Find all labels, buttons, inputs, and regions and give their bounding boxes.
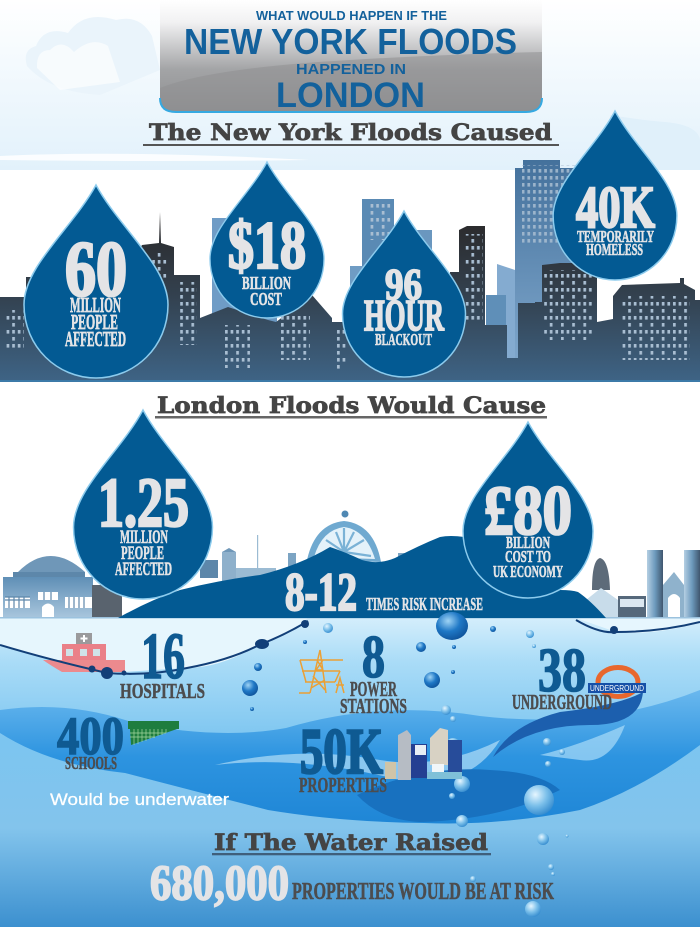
stat: 16 hospitals	[120, 620, 205, 703]
drop: 60 million people affected	[24, 185, 168, 378]
drop: 96 hour blackout: BLACKOUT	[375, 330, 432, 349]
Albert Hall	[3, 556, 122, 618]
river-side buildings	[586, 558, 646, 618]
stat: 400 schools: SCHOOLS	[65, 753, 117, 773]
wave line: right	[576, 620, 700, 634]
drop: 80 pounds billion cost: £80	[484, 473, 572, 550]
stat: 8 power stations: 8	[362, 624, 385, 690]
heading: London floods: London Floods Would Cause	[157, 393, 546, 419]
drop: 60 million people affected: 60	[65, 225, 127, 312]
Westminster	[647, 550, 700, 618]
bus and castle	[200, 535, 276, 582]
stat: 8 power stations	[340, 624, 407, 718]
stat: 50K properties	[299, 716, 387, 797]
drop: 80 pounds billion cost: BILLION	[506, 533, 550, 552]
drop: $18 billion cost: $18	[228, 207, 306, 283]
stat: 16 hospitals: HOSPITALS	[120, 679, 205, 703]
stat: 8 power stations: POWER	[350, 677, 397, 701]
icon: city buildings	[385, 728, 462, 780]
stat: 38 underground: 38	[538, 637, 586, 705]
title line 2: NEW YORK FLOODS	[184, 21, 517, 62]
stat: 8 power stations: STATIONS	[340, 694, 407, 718]
drop: 1.25 million people affected: PEOPLE	[121, 543, 164, 564]
stat: 680,000 properties at risk: 680,000	[150, 854, 289, 910]
title line 3: HAPPENED IN	[296, 61, 406, 78]
water background	[0, 618, 700, 927]
drop: 1.25 million people affected: MILLION	[120, 527, 168, 548]
drop: 60 million people affected: PEOPLE	[71, 310, 118, 334]
icon: underground roundel	[588, 668, 646, 696]
stat: 400 schools: 400	[57, 706, 124, 766]
drop: $18 billion cost	[210, 162, 324, 318]
drop: 80 pounds billion cost	[463, 422, 593, 598]
bubbles	[242, 612, 568, 917]
London skyline	[0, 510, 700, 618]
caption: would be underwater: Would be underwater	[50, 790, 229, 809]
drop: 96 hour blackout: 96	[385, 260, 422, 309]
blue hump: 8-12 times risk increase: TIMES RISK INCREASE	[366, 594, 483, 614]
icon: school	[128, 721, 179, 745]
drop: 40K temporarily homeless: HOMELESS	[586, 240, 643, 259]
sky background	[0, 0, 700, 620]
wave line: left	[0, 620, 309, 679]
drop: 80 pounds billion cost: UK ECONOMY	[493, 562, 563, 581]
drop: 40K temporarily homeless	[553, 111, 677, 280]
stat: 16 hospitals: 16	[141, 620, 185, 693]
icon: underground roundel: UNDERGROUND	[590, 684, 644, 693]
stat: 50K properties: 50K	[300, 716, 383, 788]
stat: 38 underground: UNDERGROUND	[512, 690, 612, 714]
clouds	[26, 17, 700, 170]
drop: 1.25 million people affected: 1.25	[98, 465, 189, 542]
blue hump: 8-12 times risk increase	[118, 536, 606, 622]
heading: New York floods: The New York Floods Caused	[149, 120, 552, 146]
dome	[288, 510, 406, 569]
drop: 1.25 million people affected: AFFECTED	[115, 559, 172, 580]
icon: hospital	[43, 633, 125, 672]
title line 4: LONDON	[276, 76, 425, 115]
drop: $18 billion cost: COST	[250, 289, 282, 309]
drop: 1.25 million people affected	[74, 410, 212, 599]
New York skyline	[0, 160, 700, 382]
title line 1: WHAT WOULD HAPPEN IF THE	[256, 8, 447, 23]
blue hump: 8-12 times risk increase: 8-12	[285, 562, 357, 622]
drop: 40K temporarily homeless: 40K	[576, 174, 655, 240]
drop: 60 million people affected: MILLION	[70, 293, 121, 317]
title panel	[160, 0, 542, 115]
drop: 96 hour blackout	[342, 211, 466, 377]
drop: 96 hour blackout: HOUR	[364, 291, 445, 340]
stat: 680,000 properties at risk	[150, 854, 554, 910]
lit windows	[4, 165, 690, 372]
stat: 38 underground	[512, 637, 612, 714]
icon: pylon	[299, 650, 344, 693]
drop: 80 pounds billion cost: COST TO	[505, 547, 551, 566]
heading: if the water raised: If The Water Raised	[214, 830, 488, 856]
stat: 680,000 properties at risk: PROPERTIES WOULD BE AT RISK	[292, 879, 554, 905]
drop: $18 billion cost: BILLION	[242, 273, 291, 293]
stat: 50K properties: PROPERTIES	[299, 773, 387, 797]
drop: 60 million people affected: AFFECTED	[65, 327, 126, 351]
